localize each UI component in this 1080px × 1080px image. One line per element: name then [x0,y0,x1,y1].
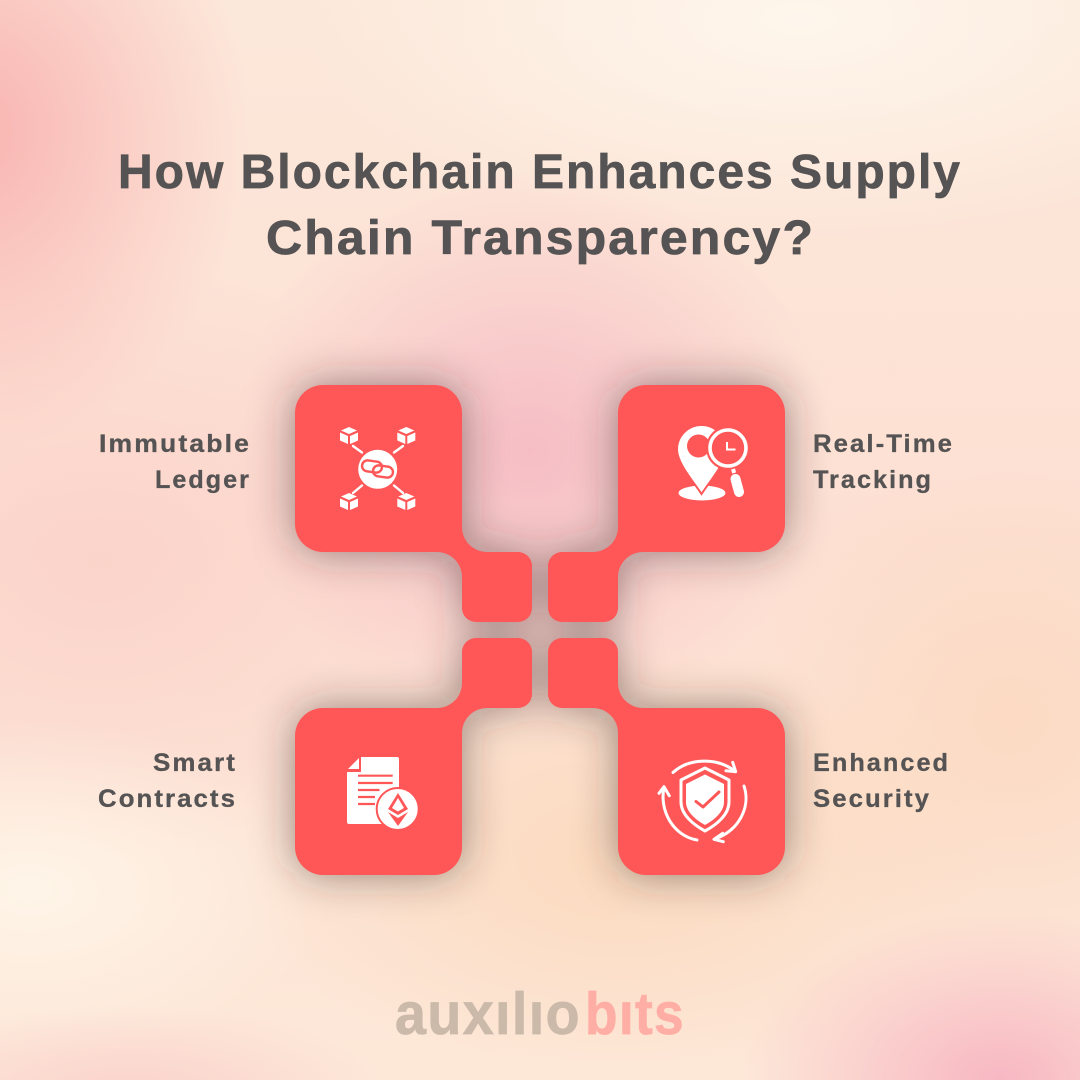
label: Real-Time Tracking: Tracking [813,466,933,494]
icon: blockchain network [340,427,415,510]
label: Immutable Ledger: Ledger [155,466,251,494]
label: Immutable Ledger [99,430,251,494]
label: Enhanced Security: Security [813,785,931,813]
panel: immutable ledger shape [295,385,532,622]
icon: location pin with magnifier [677,425,750,500]
panel: enhanced security shape [548,638,785,875]
title: How Blockchain Enhances Supply [118,146,962,199]
label: Smart Contracts [98,749,237,813]
panel: smart contracts shape [295,638,532,875]
icon: shield with rotating arrows [659,761,746,842]
logo: auxiliobits: bıts [585,981,685,1047]
shape shadows [295,385,785,875]
logo: auxiliobits [395,981,685,1047]
label: Real-Time Tracking [813,430,954,494]
title: Chain Transparency? [266,212,815,265]
icon: smart contract document [347,757,419,830]
title [118,146,962,265]
label: Immutable Ledger: Immutable [99,430,251,458]
label: Real-Time Tracking: Real-Time [813,430,954,458]
label: Smart Contracts: Smart [153,749,237,777]
logo: auxiliobits: auxılıo [395,981,581,1047]
label: Enhanced Security [813,749,950,813]
label: Smart Contracts: Contracts [98,785,237,813]
panel: real-time tracking shape [548,385,785,622]
label: Enhanced Security: Enhanced [813,749,950,777]
